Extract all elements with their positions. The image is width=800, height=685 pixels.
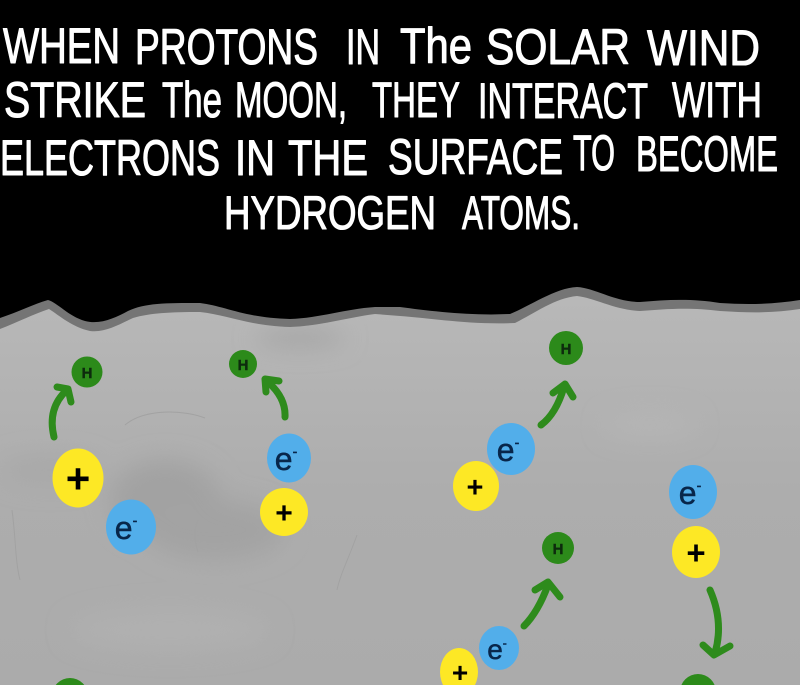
title text: INTERACT — [478, 73, 648, 129]
title text: THE — [288, 130, 368, 186]
title text: WITH — [672, 72, 762, 128]
electron: - — [503, 636, 507, 650]
atom group: proton and electron 2 — [229, 350, 311, 536]
title text: The — [162, 72, 222, 128]
title text: ATOMS. — [462, 186, 580, 239]
arrow — [265, 379, 285, 417]
title text: MOON, — [235, 72, 347, 128]
title text: THEY — [372, 72, 460, 128]
lunar surface — [0, 287, 800, 685]
atom group: proton and electron 3 — [453, 331, 583, 511]
proton — [260, 488, 308, 536]
title text: PROTONS — [135, 19, 318, 75]
title text: STRIKE — [4, 72, 146, 128]
atom group: proton and electron 4 — [440, 532, 574, 685]
surface mottling — [12, 330, 357, 590]
electron: e — [275, 441, 293, 477]
proton: + — [66, 455, 90, 502]
hydrogen atom, cropped at bottom right — [680, 674, 716, 685]
hydrogen atom, cropped at bottom left — [52, 678, 88, 685]
hydrogen atom: H — [561, 341, 571, 358]
atom group: proton and electron 5 — [669, 465, 730, 655]
electron: e — [679, 475, 697, 511]
title text: SURFACE — [388, 129, 563, 185]
hydrogen atom — [542, 532, 574, 564]
arrow — [524, 582, 560, 626]
title text: IN — [235, 130, 275, 186]
hydrogen atom — [229, 350, 257, 378]
hydrogen atom — [549, 331, 583, 365]
electron — [669, 465, 717, 519]
arrow — [52, 387, 71, 437]
electron: - — [293, 443, 298, 459]
proton — [672, 526, 720, 578]
atom group: proton and electron 1 — [52, 356, 156, 554]
arrow — [703, 590, 730, 655]
electron: e — [115, 510, 133, 546]
electron — [487, 423, 535, 475]
proton: + — [275, 497, 293, 530]
electron: e — [487, 634, 503, 665]
proton: + — [467, 472, 483, 504]
hydrogen atom: H — [82, 365, 92, 382]
title text: SOLAR — [486, 19, 630, 75]
title text: IN — [346, 19, 380, 75]
title text — [0, 18, 778, 239]
proton — [52, 448, 104, 508]
proton — [453, 461, 499, 511]
hydrogen atom: H — [238, 357, 248, 374]
proton — [440, 648, 478, 685]
hydrogen atom: H — [553, 541, 563, 558]
title text: ELECTRONS — [0, 130, 220, 186]
hydrogen atom — [72, 356, 102, 388]
title text: The — [400, 18, 472, 74]
electron — [267, 434, 311, 482]
title text: TO — [573, 125, 615, 181]
electron: e — [497, 432, 515, 468]
electron — [479, 626, 519, 670]
electron — [106, 500, 156, 554]
arrow — [541, 384, 573, 425]
title text: HYDROGEN — [224, 186, 436, 239]
electron: - — [697, 477, 702, 493]
electron: - — [133, 512, 138, 528]
proton: + — [686, 534, 706, 571]
title text: WIND — [647, 20, 760, 76]
title text: WHEN — [3, 18, 120, 74]
electron: - — [515, 434, 520, 450]
